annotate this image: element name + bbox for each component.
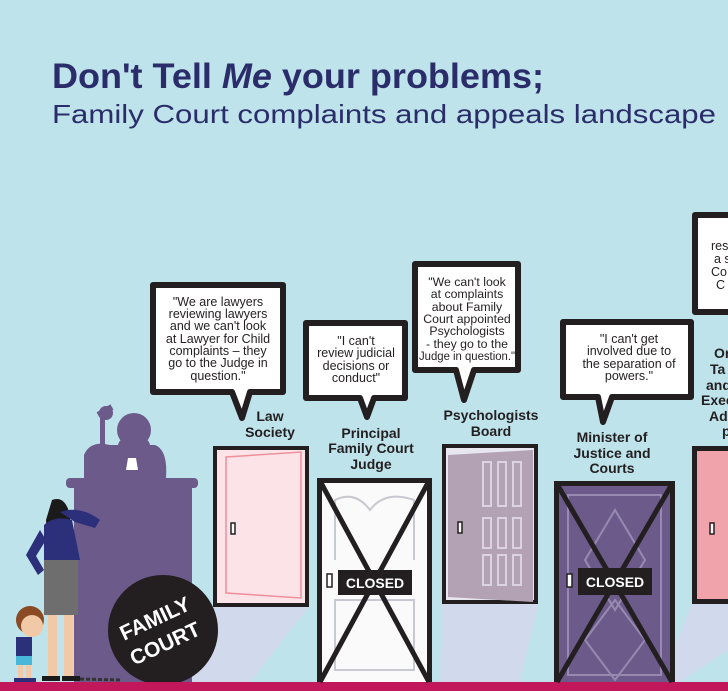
judge silhouette with podium: [66, 404, 198, 682]
door: partial right: [692, 446, 728, 604]
title: [52, 57, 716, 129]
label: Minister of Justice and Courts: Courts: [589, 460, 635, 476]
door: Principal Family Court Judge (closed): [317, 478, 432, 682]
door: Psychologists Board (open): [442, 444, 538, 604]
title: Don't Tell Me your problems;: [52, 57, 544, 96]
floor light shadows: [190, 590, 728, 682]
ball and chain: Family Court: COURT: [127, 618, 204, 670]
bubble: Law Society: reviewing lawyers: [169, 307, 267, 321]
label: Principal Family Court Judge: [328, 425, 414, 472]
woman figure: [26, 499, 100, 681]
bubble: Law Society: complaints – they: [169, 344, 267, 358]
bubble: Law Society: "We are lawyers: [173, 295, 263, 309]
bubble: Law Society: at Lawyer for Child: [166, 332, 270, 346]
bubble: Psychologists Board: Court appointed: [423, 312, 511, 326]
label: Law Society: [245, 408, 295, 440]
bubble: Psychologists Board: [415, 264, 518, 400]
bubble: Principal Family Court Judge: "I can't: [337, 334, 375, 348]
door: Principal Family Court Judge (closed): CLOSED: [346, 575, 404, 591]
bubble: Psychologists Board: "We can't look: [428, 275, 507, 289]
bubble: partial right: [695, 215, 728, 312]
bubble: Principal Family Court Judge: decisions or: [323, 359, 389, 373]
label: Psychologists Board: Board: [471, 423, 511, 439]
label: partial right: [701, 345, 728, 439]
ball and chain: Family Court: [80, 575, 218, 685]
door: Minister of Justice (closed): CLOSED: [586, 574, 644, 590]
bubble: partial right: res: [711, 239, 728, 253]
bubble: Minister of Justice: "I can't get: [600, 332, 659, 346]
label: Psychologists Board: Psychologists: [444, 407, 539, 423]
label: Principal Family Court Judge: Principal: [341, 425, 401, 441]
label: Law Society: Law: [256, 408, 284, 424]
door: Minister of Justice (closed): [554, 481, 675, 682]
label: Principal Family Court Judge: Family Court: [328, 440, 414, 456]
bubble: partial right: Co: [711, 265, 727, 279]
bubble: Minister of Justice: the separation of: [582, 357, 676, 371]
bubble: Minister of Justice: [563, 322, 691, 422]
label: partial right: Ta: [710, 361, 726, 377]
child figure: [14, 606, 44, 682]
bubble: partial right: C: [716, 278, 725, 292]
bubble: Minister of Justice: powers.": [605, 369, 653, 383]
title: Family Court complaints and appeals landscape: [52, 99, 716, 129]
label: Psychologists Board: [444, 407, 539, 439]
label: Principal Family Court Judge: Judge: [350, 456, 392, 472]
bubble: Psychologists Board: at complaints: [431, 287, 503, 301]
bubble: Principal Family Court Judge: review judicial: [317, 346, 395, 360]
bubble: Law Society: [153, 285, 283, 418]
bottom strip: [0, 682, 728, 691]
bubble: Minister of Justice: involved due to: [587, 344, 671, 358]
label: Minister of Justice and Courts: Minister of: [577, 429, 648, 445]
label: Minister of Justice and Courts: [573, 429, 651, 476]
bubble: Principal Family Court Judge: conduct": [332, 371, 380, 385]
label: Law Society: Society: [245, 424, 295, 440]
label: Minister of Justice and Courts: Justice and: [573, 445, 651, 461]
bubble: Law Society: go to the Judge in: [168, 356, 268, 370]
bubble: Psychologists Board: Judge in question.": [419, 349, 515, 363]
bubble: Principal Family Court Judge: [306, 323, 405, 417]
label: partial right: Ad: [709, 408, 728, 424]
bubble: Psychologists Board: about Family: [432, 300, 503, 314]
bubble: Law Society: and we can't look: [170, 319, 267, 333]
ball and chain: Family Court: FAMILY: [116, 593, 194, 645]
bubble: Psychologists Board: - they go to the: [426, 337, 508, 351]
bubble: Psychologists Board: Psychologists: [429, 324, 505, 338]
door: Law Society (open): [213, 446, 309, 607]
bubble: Law Society: question.": [190, 369, 246, 383]
